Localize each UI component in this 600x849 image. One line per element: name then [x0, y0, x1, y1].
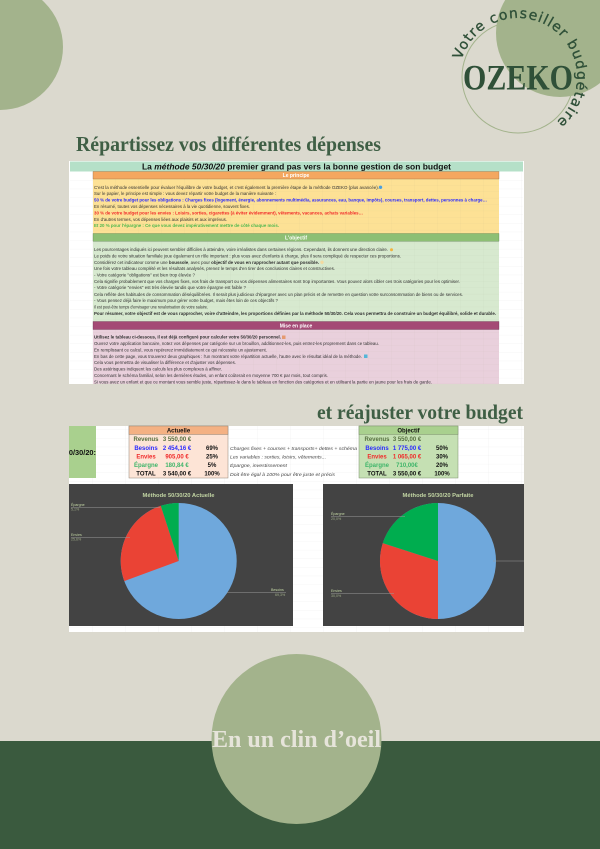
section: mise en place: Concernant le schéma familial, selon les dernières études, un enfant coûterait en moyenne 700 € par mois, tout compris.: [94, 373, 328, 378]
section: le principe: [93, 172, 499, 234]
chart: pie parfaite: [323, 484, 524, 626]
section: mise en place: Cela vous permettra de visualiser la différence et d'ajuster vos dépenses.: [94, 360, 236, 365]
table: objectif: [359, 426, 458, 478]
footer band: [0, 741, 600, 849]
table notes: [230, 446, 357, 478]
chart: pie actuelle: [69, 484, 293, 626]
table: actuelle: Actuelle: [167, 428, 191, 434]
decorative circle top left: [0, 0, 63, 110]
green side label: 0/30/20:: [69, 448, 96, 457]
table: actuelle: Envies: [136, 454, 156, 460]
table: objectif: 50%: [436, 446, 449, 452]
table: objectif: 3 550,00 €: [393, 472, 422, 478]
section: mise en place: Des astérisques indiquent les calculs les plus complexes à affiner.: [94, 366, 222, 372]
table: objectif: Envies: [367, 454, 387, 460]
table: objectif: 1 065,00 €: [393, 454, 422, 460]
pie labels: Envies: [331, 589, 342, 593]
section: l'objectif: - Vous pensez déjà faire le maximum pour gérer votre budget, mais êtes loin de ces objectifs ?: [94, 298, 278, 303]
pie labels: 30,0%: [331, 594, 342, 598]
section: mise en place: Mise en place: [280, 324, 312, 330]
table: actuelle: 905,00 €: [165, 454, 189, 460]
pie labels: 69,3%: [275, 593, 286, 597]
green side label: [69, 426, 96, 478]
table: objectif: Épargne: [365, 461, 390, 469]
table: actuelle: 5%: [208, 463, 217, 469]
table: actuelle: [129, 426, 228, 478]
section: le principe: En d'autres termes, vos dépenses liées aux plaisirs et aux imprévus.: [94, 217, 227, 222]
table notes: Charges fixes + courses + transports+ dettes + schéma: [230, 446, 357, 452]
table notes: Doit être égal à 100% pour être juste et précis: [230, 472, 336, 478]
table: objectif: Revenus: [364, 437, 390, 443]
section: l'objectif: - Votre catégorie "obligations" est bien trop élevée ?: [94, 272, 195, 278]
section: le principe: Le principe: [283, 173, 310, 179]
footer text: En un clin d’oeil: [212, 727, 381, 753]
section: l'objectif: Il est peut-être temps d'envisager une revalorisation de votre salaire.: [94, 304, 208, 310]
pie labels: 25,6%: [71, 538, 82, 542]
pie labels: Envies: [71, 533, 82, 537]
pie slices: [121, 503, 237, 619]
section: l'objectif: Cela signifie probablement que vos charges fixes, vos frais de transport ou vos dépenses alimentaires sont trop importantes. Vous pouvez alors cibler ces trois catégories pour les optimiser.: [94, 279, 460, 284]
table: actuelle: TOTAL: [136, 472, 156, 478]
table: actuelle: Revenus: [133, 437, 159, 443]
pie slices: [380, 503, 496, 619]
section: le principe: 50 % de votre budget pour les obligations : Charges fixes (logement, énergie, abonnements multimédia, assurances, eau, banque, impôts), courses, transport, dettes, personnes à charge…: [94, 198, 487, 202]
section: l'objectif: Le poids de votre situation familiale joue également un rôle important : plus vous avez d'enfants à charge, plus il sera compliqué de respecter ces proportions.: [94, 254, 401, 258]
table: actuelle: Épargne: [134, 461, 159, 469]
heading: main title: Répartissez vos différentes dépenses: [76, 132, 381, 156]
table: actuelle: Besoins: [134, 446, 158, 452]
table: objectif: 3 550,00 €: [393, 437, 422, 443]
title bar: [70, 161, 523, 172]
section: le principe: C'est la méthode essentielle pour évaluer l'équilibre de votre budget, et c'est également la première étape de la méthode OZEKO (plus avancée).: [94, 185, 379, 190]
table: objectif: 1 775,00 €: [393, 446, 422, 452]
table: actuelle: 25%: [206, 454, 219, 460]
section: mise en place: Si vous avez un enfant et que ce montant vous semble juste, répartissez-le dans le tableau en fonction des catégories et en utilisant la partie en jaune pour les frais de garde.: [94, 379, 432, 384]
table: objectif: 100%: [434, 472, 450, 478]
section: l'objectif: Cela reflète des habitudes de consommation déséquilibrées. Il serait plus judicieux d'épargner avec un plan précis et de remettre en question votre surconsommation de biens ou de services.: [94, 292, 463, 297]
table notes: Épargne, investissement: [230, 462, 288, 469]
heading: second title: et réajuster votre budget: [317, 400, 523, 424]
section: mise en place: En bas de cette page, vous trouverez deux graphiques : l'un montrant votre répartition actuelle, l'autre avec le résultat idéal de la méthode.: [94, 354, 362, 359]
decorative circle top right: [496, 0, 600, 97]
section: le principe: Sur le papier, le principe est simple : vous devez répartir votre budget de la manière suivante :: [94, 191, 276, 196]
table: objectif: 710,00€: [396, 463, 418, 469]
section: l'objectif: Pour résumer, votre objectif est de vous rapprocher, voire d'atteindre, les proportions définies par la méthode 50/30/20. Cela vous permettra de construire un budget équilibré, solide et durable.: [94, 311, 496, 316]
table: actuelle: 180,84 €: [165, 463, 189, 469]
pie labels: 5,1%: [71, 508, 80, 512]
table: objectif: TOTAL: [367, 472, 387, 478]
section: le principe: Et 20 % pour l'épargne : Ce que vous devez impérativement mettre de côté chaque mois.: [94, 223, 279, 228]
pie labels: Besoins: [271, 588, 284, 592]
logo wordmark: OZEKO: [463, 58, 573, 98]
section: l'objectif: Considérez cet indicateur comme une boussole, avec pour objectif de vous en rapprocher autant que possible.: [94, 260, 319, 265]
section: le principe: 30 % de votre budget pour les envies : Loisirs, sorties, cigarettes (à éviter évidemment), vêtements, vacances, achats variables…: [94, 210, 363, 216]
pie labels: 20,0%: [331, 517, 342, 521]
table: objectif: 30%: [436, 454, 449, 460]
title bar: La méthode 50/30/20 premier grand pas vers la bonne gestion de son budget: [142, 161, 451, 171]
section: mise en place: [93, 322, 499, 384]
chart: pie parfaite: Méthode 50/30/20 Parfaite: [403, 493, 474, 499]
table: actuelle: 69%: [206, 446, 219, 452]
pie labels: Épargne: [331, 511, 345, 516]
chart: pie actuelle: Méthode 50/30/20 Actuelle: [143, 493, 215, 499]
panel: budget tables and charts: [69, 426, 524, 632]
section: l'objectif: [93, 234, 499, 322]
section: mise en place: Ouvrez votre application bancaire, notez vos dépenses par catégorie sur un brouillon, additionnez-les, puis entrez-les proprement dans ce tableau.: [94, 341, 379, 346]
table: actuelle: 3 540,00 €: [163, 472, 192, 478]
section: l'objectif: Les pourcentages indiqués ici peuvent sembler difficiles à atteindre, voire irréalistes dans certaines régions. Cependant, ils donnent une direction claire.: [94, 247, 388, 252]
section: mise en place: Utilisez le tableau ci-dessous, il est déjà configuré pour calculer votre 50/30/20 personnel.: [94, 334, 281, 340]
footer circle: [212, 654, 382, 824]
panel: spreadsheet method: [69, 161, 524, 384]
pie labels: [331, 511, 524, 598]
section: mise en place: En remplissant ce calcul, vous repérerez immédiatement ce qui nécessite un ajustement.: [94, 348, 267, 352]
pie labels: Épargne: [71, 502, 85, 507]
section: le principe: En résumé, toutes vos dépenses nécessaires à la vie quotidienne, souvent fixes.: [94, 204, 250, 209]
table: objectif: Objectif: [397, 428, 421, 434]
section: l'objectif: L'objectif: [285, 235, 307, 241]
table notes: Les variables : sorties, loisirs, vêtements...: [230, 454, 326, 460]
pie labels: [71, 502, 286, 597]
table: objectif: 20%: [436, 463, 449, 469]
table: actuelle: 3 550,00 €: [163, 437, 192, 443]
logo: OZEKO: [452, 10, 588, 134]
logo circular tagline: Votre conseiller budgétaire: [452, 10, 588, 126]
table: objectif: Besoins: [365, 446, 389, 452]
table: actuelle: 2 454,16 €: [163, 446, 192, 452]
section: l'objectif: - Votre catégorie "envies" est très élevée tandis que votre épargne est faible ?: [94, 285, 246, 290]
section: l'objectif: Une fois votre tableau complété et les résultats analysés, prenez le temps d'en tirer des conclusions claires et constructives.: [94, 266, 335, 271]
table: actuelle: 100%: [204, 472, 220, 478]
